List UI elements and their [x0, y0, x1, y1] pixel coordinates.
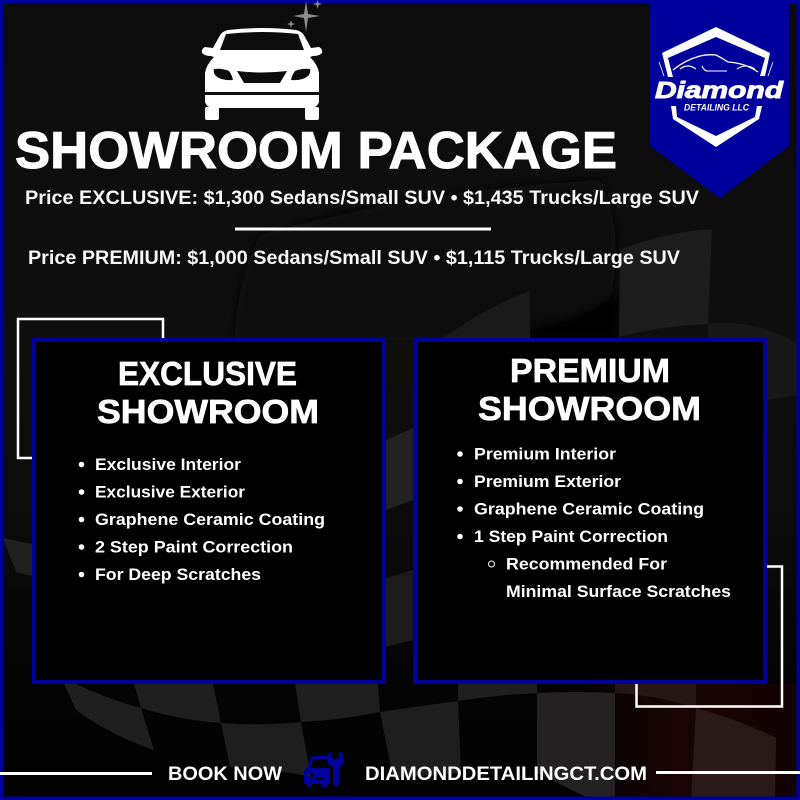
panel: exclusive showroom — [34, 340, 384, 682]
footer left line — [0, 772, 152, 775]
divider line between prices — [235, 228, 491, 230]
list: premium features: Graphene Ceramic Coating — [474, 500, 704, 518]
footer right line — [656, 771, 800, 774]
heading: exclusive showroom — [97, 355, 319, 430]
logo subtext: DETAILING LLC — [684, 102, 749, 112]
checker squares below panels — [64, 684, 154, 750]
left white accent frame — [18, 319, 163, 458]
heading: exclusive showroom: SHOWROOM — [97, 393, 319, 430]
list: premium features: Minimal Surface Scratches — [506, 583, 731, 601]
text: exclusive price line: Price EXCLUSIVE: $1,300 Sedans/Small SUV • $1,435 Trucks/Large SUV — [25, 188, 699, 209]
icon: white car front view with sparkles — [202, 0, 322, 120]
text: premium price line: Price PREMIUM: $1,000 Sedans/Small SUV • $1,115 Trucks/Large SUV — [28, 248, 680, 269]
list: premium features: 1 Step Paint Correction — [474, 528, 668, 546]
list: exclusive features: 2 Step Paint Correction — [95, 538, 293, 556]
logo text: Diamond — [655, 77, 784, 103]
list: exclusive features — [79, 456, 325, 584]
heading: premium showroom — [478, 352, 701, 427]
heading: premium showroom: SHOWROOM — [478, 390, 701, 427]
heading: exclusive showroom: EXCLUSIVE — [118, 355, 297, 392]
list: exclusive features: Exclusive Exterior — [95, 484, 246, 502]
logo: hexagon and car — [659, 27, 773, 147]
logo ribbon — [650, 0, 789, 198]
footer text: website: DIAMONDDETAILINGCT.COM — [365, 764, 647, 785]
right white accent frame — [636, 566, 782, 706]
list: exclusive features: For Deep Scratches — [95, 566, 261, 584]
list: exclusive features: Exclusive Interior — [95, 456, 242, 474]
list: premium features: Recommended For — [506, 556, 668, 574]
title: SHOWROOM PACKAGE — [15, 122, 617, 180]
checker squares between panels — [386, 428, 413, 510]
list: premium features: Premium Exterior — [474, 473, 622, 491]
list: premium features — [457, 446, 731, 601]
icon: sparkles — [287, 0, 322, 32]
list: exclusive features: Graphene Ceramic Coating — [95, 511, 325, 529]
heading: premium showroom: PREMIUM — [510, 352, 670, 389]
icon: car and wrench — [304, 751, 344, 787]
footer text: book now: BOOK NOW — [168, 764, 282, 785]
panel: premium showroom — [415, 340, 765, 682]
list: premium features: Premium Interior — [474, 446, 617, 464]
